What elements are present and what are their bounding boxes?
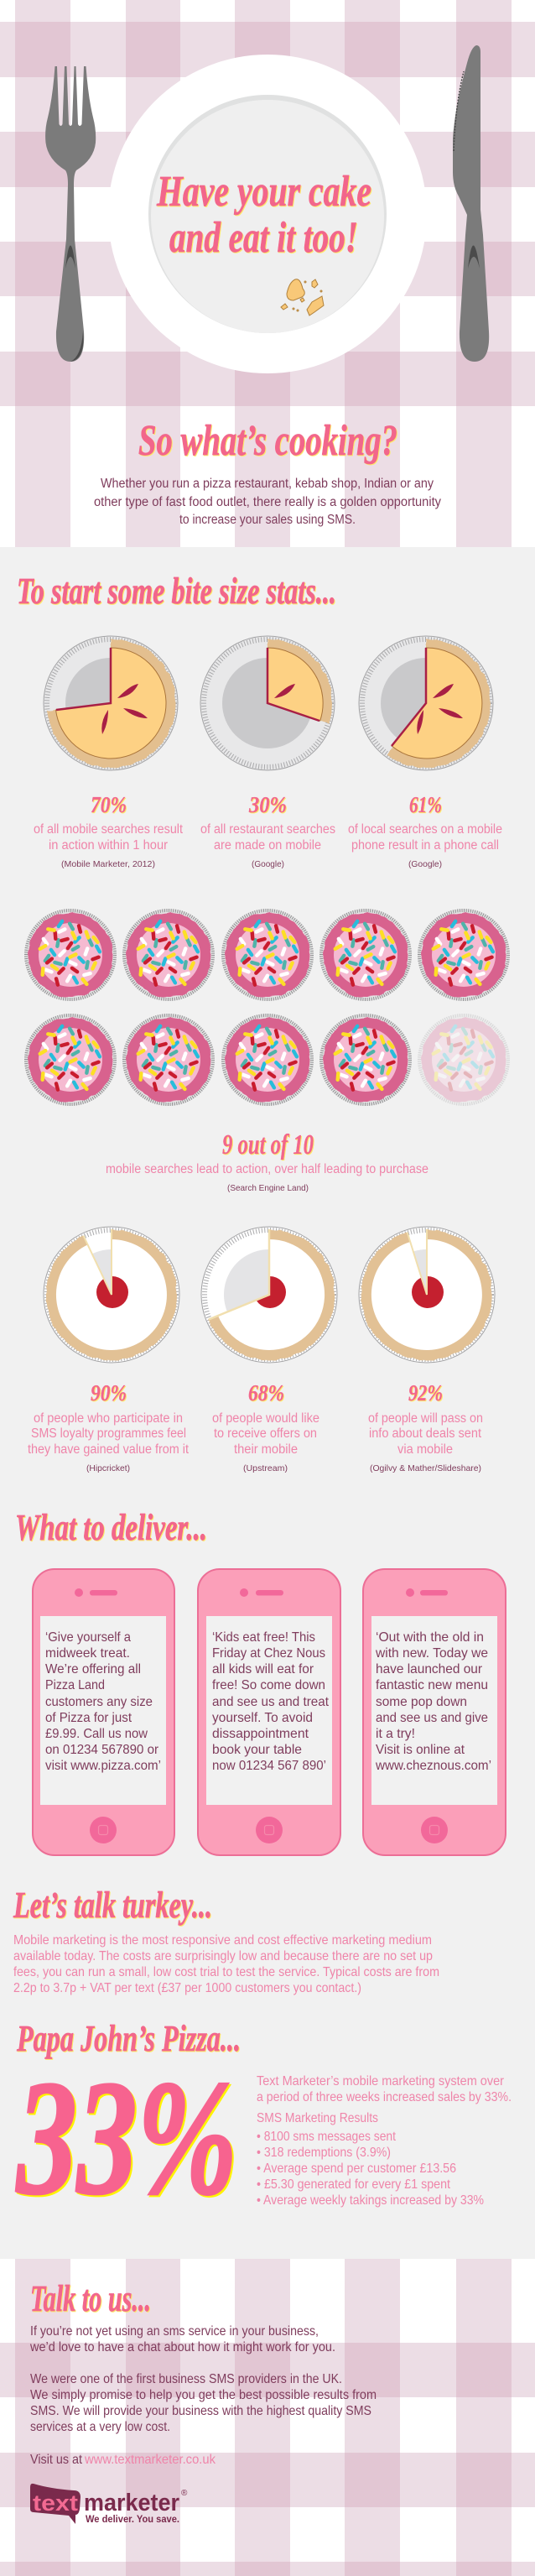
phone: new menu message: with new. Today we	[375, 1646, 488, 1661]
panel: gingham tablecloth footer	[0, 2259, 535, 2576]
stat: 9 out of 10: 9 out of 10	[222, 1129, 314, 1160]
phone: new menu message: some pop down	[376, 1695, 467, 1709]
phone: new menu message: ‘Out with the old in	[376, 1630, 484, 1645]
text: sms marketing results: • Average weekly takings increased by 33%	[257, 2193, 484, 2208]
pictogram: 9 out of 10 iced tarts	[24, 909, 510, 1106]
text: sms marketing results	[257, 2074, 512, 2208]
phone: new menu message: www.cheznous.com’	[375, 1759, 491, 1773]
phone: kids eat free message: book your table	[212, 1743, 302, 1757]
stat: 61%: of local searches on a mobile	[348, 822, 502, 837]
stat: 30%: (Google)	[252, 859, 284, 869]
stat: 68%: (Upstream)	[243, 1463, 288, 1473]
text: contact information: we’d love to have a chat about how it might work for you.	[29, 2340, 335, 2354]
text: sms marketing results: Text Marketer’s mobile marketing system over	[257, 2074, 505, 2088]
text: contact information: SMS. We will provide your business with the highest quality SMS	[30, 2404, 371, 2418]
stat: 92%: 92%	[408, 1380, 443, 1405]
logo: text marketer: text	[33, 2490, 78, 2516]
heading: let's talk turkey: Let’s talk turkey...	[13, 1885, 212, 1926]
logo: text marketer: marketer	[84, 2490, 179, 2516]
phone: kids eat free message: free! So come down	[212, 1678, 325, 1692]
stat: 70%	[34, 792, 184, 869]
phone: new menu message: it a try!	[376, 1727, 415, 1741]
logo: text marketer: We deliver. You save.	[86, 2513, 179, 2525]
text: contact information: Visit us at	[30, 2453, 82, 2467]
phone: new menu message: have launched our	[376, 1662, 483, 1676]
logo: text marketer: ®	[181, 2489, 188, 2498]
text: mobile marketing costs	[13, 1933, 439, 1995]
phone: pizza message: customers any size	[45, 1695, 153, 1709]
stat: 90%: 90%	[91, 1380, 127, 1405]
intro text: other type of fast food outlet, there really is a golden opportunity	[94, 495, 441, 509]
stat: 61%: phone result in a phone call	[351, 838, 499, 853]
phone: kids eat free message: now 01234 567 890’	[212, 1759, 326, 1773]
panel: gingham tablecloth header	[0, 0, 535, 547]
stat: 90%: they have gained value from it	[28, 1442, 190, 1457]
stat: 90%	[28, 1380, 190, 1473]
title: and eat it too!	[169, 214, 358, 262]
icon: cake crumbs	[281, 279, 324, 315]
phone: kids eat free message: all kids will eat for	[212, 1662, 314, 1676]
title	[156, 168, 371, 262]
phone: pizza message: Pizza Land	[45, 1678, 105, 1692]
text: contact information: services at a very low cost.	[30, 2420, 170, 2434]
phone: kids eat free message: dissappointment	[212, 1727, 309, 1741]
text: sms marketing results: • Average spend per customer £13.56	[257, 2161, 456, 2176]
pie chart: 90% bakewell	[44, 1227, 179, 1363]
phone: kids eat free message: ‘Kids eat free! This	[212, 1630, 315, 1645]
pie chart: 68% bakewell	[201, 1227, 337, 1363]
text: sms marketing results: • 8100 sms messages sent	[257, 2130, 396, 2144]
stat: 90%: (Hipcricket)	[86, 1463, 130, 1473]
stat: 68%	[212, 1380, 319, 1473]
stat: 61%: 61%	[409, 792, 442, 817]
heading: bite size stats: To start some bite size stats...	[17, 571, 336, 612]
stat: 9 out of 10: mobile searches lead to action, over half leading to purchase	[106, 1162, 429, 1176]
logo: text marketer	[30, 2484, 188, 2525]
text: mobile marketing costs: Mobile marketing is the most responsive and cost effective marketing medium	[13, 1933, 432, 1948]
pie chart: 61%	[359, 636, 493, 770]
text: sms marketing results: SMS Marketing Results	[257, 2111, 378, 2125]
phone: pizza message: of Pizza for just	[45, 1711, 132, 1725]
text: contact information	[29, 2324, 377, 2467]
text: sms marketing results: • £5.30 generated for every £1 spent	[257, 2177, 450, 2192]
stat: 30%: are made on mobile	[214, 838, 321, 853]
heading: what to deliver: What to deliver...	[15, 1507, 207, 1548]
stat: 70%: (Mobile Marketer, 2012)	[61, 859, 155, 869]
stat: 30%: of all restaurant searches	[200, 822, 335, 837]
stat: 68%: their mobile	[234, 1442, 298, 1457]
stat: 90%: SMS loyalty programmes feel	[31, 1426, 186, 1441]
phone: new menu message: Visit is online at	[376, 1743, 465, 1757]
text: sms marketing results: • 318 redemptions (3.9%)	[257, 2146, 391, 2160]
icon: fork	[45, 66, 96, 362]
phone: pizza message: £9.99. Call us now	[45, 1727, 148, 1741]
intro text: to increase your sales using SMS.	[179, 513, 356, 527]
phone: pizza message: We’re offering all	[45, 1662, 141, 1676]
pie chart: 70%	[44, 636, 178, 770]
pie chart: 92% bakewell	[359, 1227, 495, 1363]
intro text: Whether you run a pizza restaurant, kebab shop, Indian or any	[101, 477, 434, 491]
big number: 33%: 33%	[16, 2047, 237, 2229]
pie chart: 30%	[200, 636, 335, 770]
plate	[108, 55, 427, 373]
stat: 92%: of people will pass on	[368, 1411, 483, 1426]
phone: pizza message: on 01234 567890 or	[45, 1743, 159, 1757]
heading: so what's cooking: So what’s cooking?	[138, 417, 397, 465]
phone: new menu message	[363, 1569, 506, 1855]
text: contact information: We were one of the first business SMS providers in the UK.	[30, 2372, 342, 2386]
phone: new menu message: and see us and give	[376, 1711, 488, 1725]
stat: 9 out of 10	[106, 1129, 429, 1193]
phone: kids eat free message: yourself. To avoid	[212, 1711, 313, 1725]
stat: 61%: (Google)	[408, 859, 442, 869]
stat: 92%: via mobile	[397, 1442, 453, 1457]
stat: 90%: of people who participate in	[34, 1411, 183, 1426]
phone: pizza message: ‘Give yourself a	[45, 1630, 131, 1645]
text: contact information: www.textmarketer.co.uk	[84, 2453, 216, 2467]
stat: 68%: of people would like	[212, 1411, 319, 1426]
text: contact information: We simply promise to help you get the best possible results from	[30, 2388, 377, 2402]
phone: new menu message: fantastic new menu	[376, 1678, 488, 1692]
text: contact information: If you’re not yet using an sms service in your business,	[30, 2324, 319, 2339]
heading: papa john's pizza: Papa John’s Pizza...	[16, 2018, 241, 2059]
stat: 68%: to receive offers on	[214, 1426, 317, 1441]
text: mobile marketing costs: available today. The costs are surprisingly low and because there are no set up	[13, 1949, 433, 1963]
stat: 92%: info about deals sent	[369, 1426, 482, 1441]
stat: 92%	[368, 1380, 483, 1473]
title: Have your cake	[156, 168, 371, 216]
phone: pizza message: midweek treat.	[45, 1646, 130, 1661]
stat: 68%: 68%	[248, 1380, 284, 1405]
stat: 30%: 30%	[248, 792, 287, 817]
icon: knife	[453, 45, 489, 362]
phone: pizza message	[33, 1569, 174, 1855]
phone: kids eat free message: and see us and treat	[212, 1695, 330, 1709]
stat: 70%: in action within 1 hour	[49, 838, 168, 853]
intro text	[94, 477, 441, 527]
stat: 70%: of all mobile searches result	[34, 822, 184, 837]
stat: 9 out of 10: (Search Engine Land)	[227, 1183, 309, 1193]
text: mobile marketing costs: fees, you can run a small, low cost trial to test the service. Typical costs are from	[13, 1965, 439, 1979]
stat: 61%	[348, 792, 502, 869]
phone: kids eat free message	[198, 1569, 340, 1855]
phone: kids eat free message: Friday at Chez Nous	[212, 1646, 325, 1661]
phone: pizza message: visit www.pizza.com’	[45, 1759, 161, 1773]
stat: 30%	[200, 792, 335, 869]
text: mobile marketing costs: 2.2p to 3.7p + VAT per text (£37 per 1000 customers you contact.)	[13, 1981, 361, 1995]
stat: 92%: (Ogilvy & Mather/Slideshare)	[370, 1463, 481, 1473]
stat: 70%: 70%	[91, 792, 127, 817]
heading: talk to us: Talk to us...	[30, 2278, 151, 2319]
